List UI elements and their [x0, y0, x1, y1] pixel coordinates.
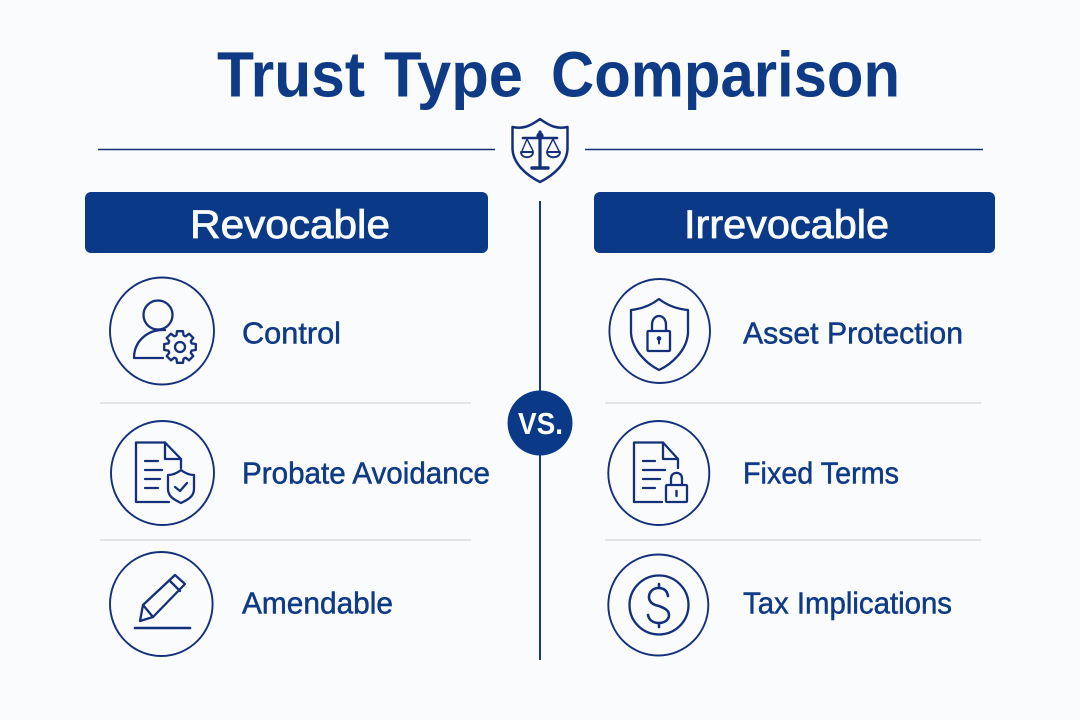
VS badge: VS. — [518, 406, 563, 441]
title: Type — [384, 38, 523, 110]
icon: amendable — [110, 552, 213, 656]
icon: tax implications — [608, 554, 708, 656]
icon: asset protection — [609, 279, 710, 383]
icon: shield with scales of justice — [512, 119, 568, 182]
panel: Revocable header — [85, 192, 488, 253]
label: asset protection: Asset Protection — [743, 316, 963, 350]
panel: Revocable header: Revocable — [190, 203, 390, 247]
label: probate avoidance: Probate Avoidance — [242, 456, 490, 490]
label: control: Control — [242, 316, 341, 350]
icon: probate avoidance — [111, 421, 214, 525]
icon: fixed terms — [608, 421, 709, 525]
label: fixed terms: Fixed Terms — [743, 456, 899, 490]
label: amendable: Amendable — [242, 586, 393, 620]
panel: Irrevocable header — [594, 192, 995, 253]
title: Comparison — [551, 38, 900, 110]
title — [217, 38, 900, 110]
panel: Irrevocable header: Irrevocable — [684, 203, 889, 247]
title: Trust — [217, 38, 365, 110]
label: tax implications: Tax Implications — [743, 586, 952, 620]
icon: control — [110, 278, 214, 384]
VS badge — [508, 390, 572, 456]
